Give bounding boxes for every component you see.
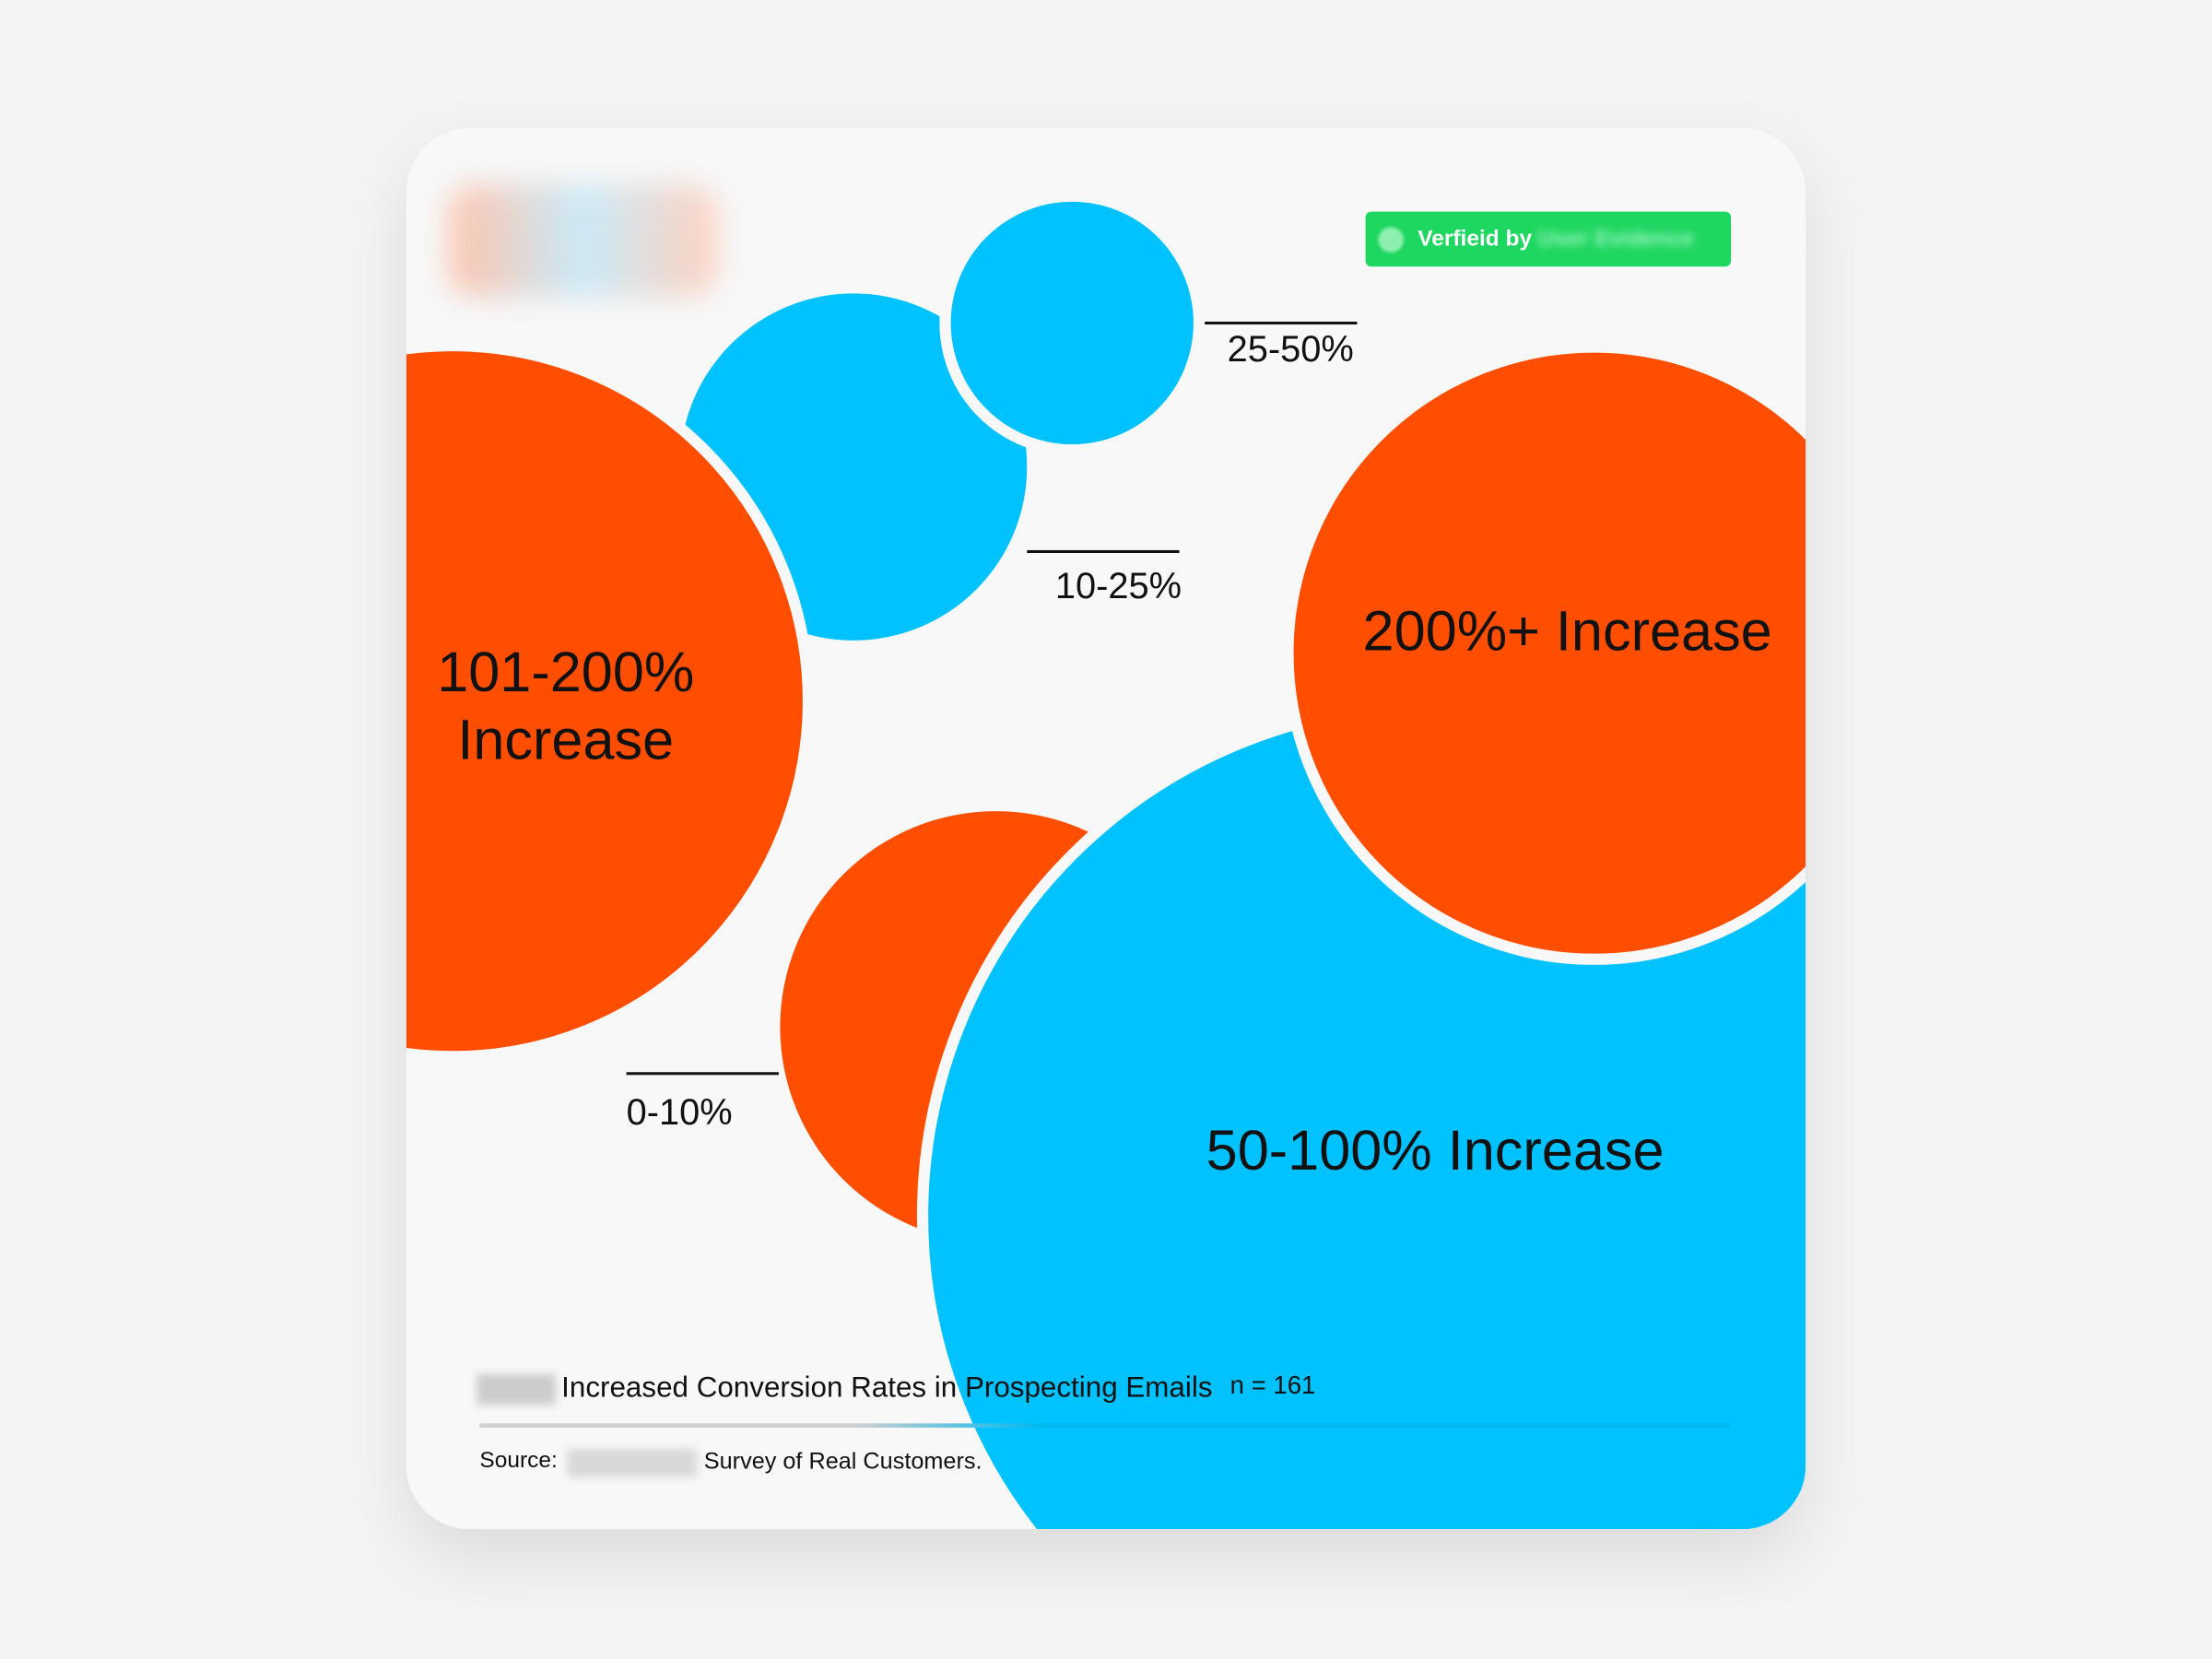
verified badge: Verfieid by User Evidence: [1418, 227, 1694, 251]
blurred logo: [449, 185, 717, 298]
bubble: 0-10%: [780, 811, 1212, 1242]
source text: Source:: [479, 1449, 558, 1473]
card: [406, 128, 1806, 1529]
label: 200%+ Increase: 200%+ Increase: [1363, 601, 1772, 663]
bubble: 101-200%: [98, 346, 808, 1056]
verified badge: [1366, 212, 1731, 266]
label: 101-200% Increase: Increase: [457, 710, 674, 771]
bubble chart: [406, 201, 1806, 1530]
bubble: 10-25%: [680, 293, 1027, 641]
divider line: [479, 1423, 1730, 1428]
bubble: 50-100%: [923, 705, 1944, 1659]
chart title: n = 161: [1230, 1371, 1315, 1399]
source text: Survey of Real Customers.: [704, 1449, 982, 1474]
chart title: Increased Conversion Rates in Prospecting Emails: [561, 1371, 1213, 1404]
bubble: 25-50%: [946, 196, 1199, 450]
label: 101-200% Increase: [437, 641, 694, 771]
source text: [479, 1446, 982, 1480]
bubble: 200%+: [1288, 347, 1900, 959]
label: 101-200% Increase: 101-200%: [437, 641, 694, 704]
chart title: [474, 1371, 1315, 1408]
label: 25-50%: 25-50%: [1228, 327, 1354, 370]
label: 10-25%: 10-25%: [1055, 564, 1182, 606]
label: 50-100% Increase: 50-100% Increase: [1206, 1120, 1665, 1182]
label: 0-10%: 0-10%: [627, 1090, 733, 1133]
